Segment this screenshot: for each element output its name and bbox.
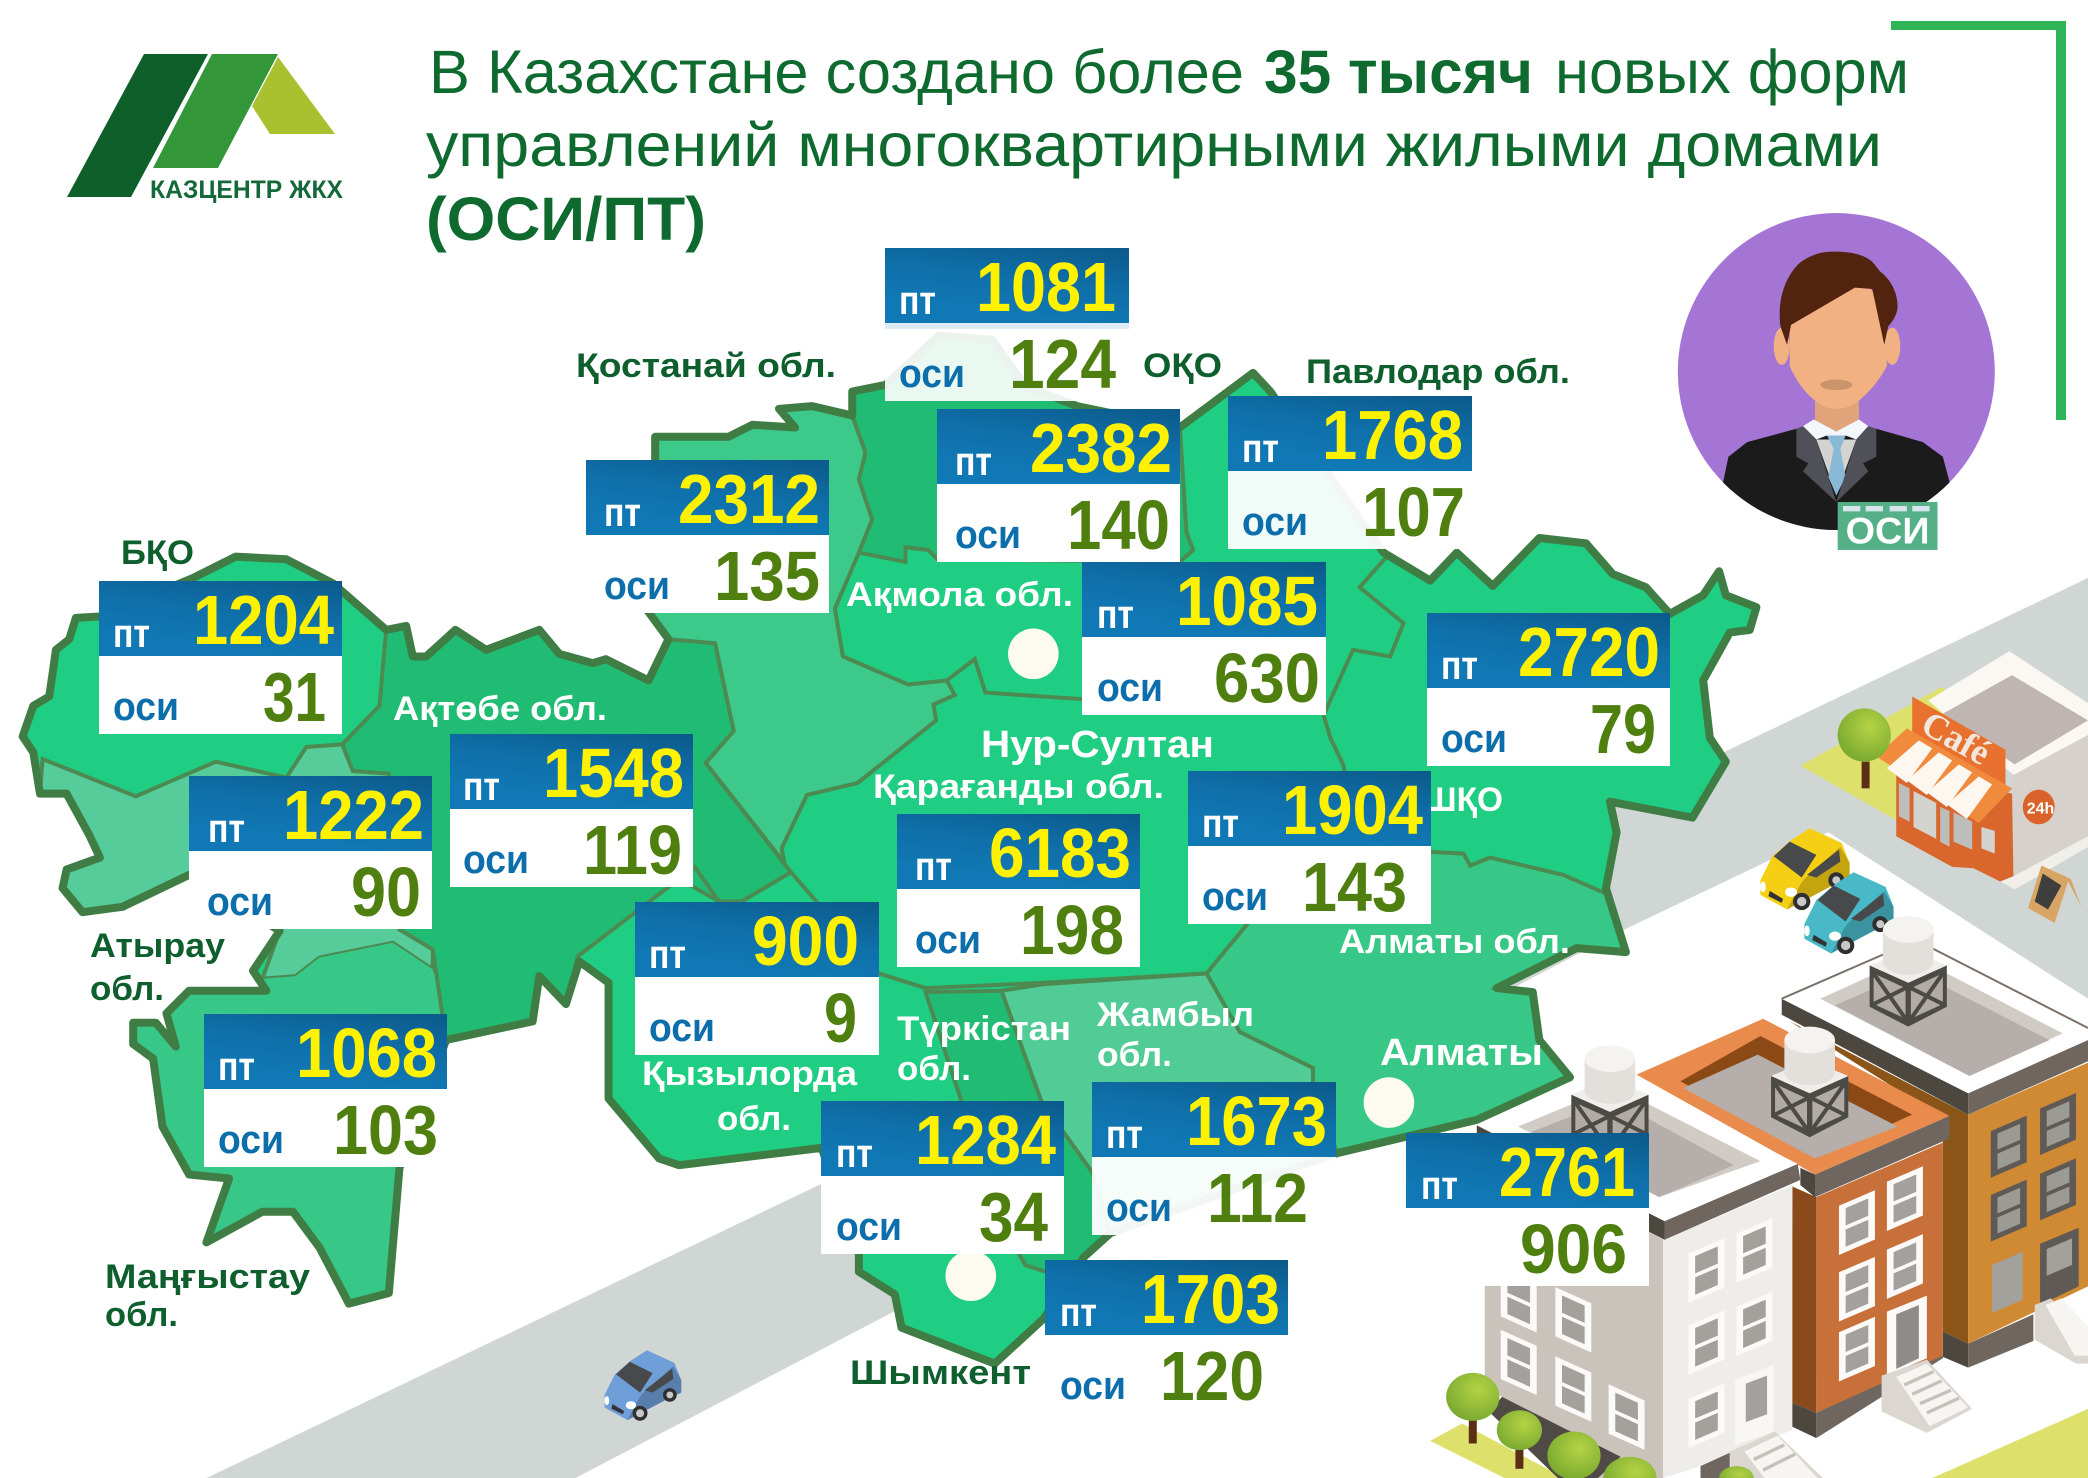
panel: ШҚО 1904 / 143: 143 xyxy=(1302,848,1407,926)
region: Kostanay xyxy=(639,406,955,863)
panel: Ақтөбе 1222 / 90: 90 xyxy=(351,853,421,931)
panel: Қызылорда 900 / 9: 900 xyxy=(752,902,859,980)
panel: Қостанай 2312 / 135: пт xyxy=(604,491,641,535)
cafe building: Café xyxy=(1915,703,1997,773)
illustration: person with OSI badge xyxy=(1678,213,1995,533)
water tanks xyxy=(1870,916,1947,1027)
city marker: Almaty xyxy=(1364,1077,1414,1128)
region labels: обл. xyxy=(105,1296,178,1334)
panel: Ақмола 1085 / 630: 630 xyxy=(1214,639,1320,717)
city marker: Shymkent xyxy=(945,1250,996,1301)
white building xyxy=(1485,1145,1663,1478)
title: В Казахстане создано более xyxy=(429,38,1244,106)
region: Almaty oblast xyxy=(1206,851,1626,1153)
map of Kazakhstan xyxy=(23,336,1756,1364)
title: управлений многоквартирными жилыми домами xyxy=(426,111,1882,179)
region labels: Маңғыстау xyxy=(105,1258,310,1296)
panel: Маңғыстау 1068 / 103: 103 xyxy=(333,1091,438,1169)
panel: ШҚО 1904 / 143: оси xyxy=(1202,875,1268,919)
panel: ОҚО 1081 / 124: оси xyxy=(899,352,965,396)
car: teal xyxy=(1804,872,1894,954)
title: 35 тысяч xyxy=(1264,38,1533,106)
region labels: Қызылорда xyxy=(642,1055,858,1093)
panel: Алматы 2761 / 906: 906 xyxy=(1520,1210,1627,1288)
panel: Павлодар 1768 / 107 xyxy=(1228,396,1472,551)
title xyxy=(426,38,1909,253)
region labels: ОҚО xyxy=(1143,347,1222,385)
panel: ШҚО 2720 / 79: оси xyxy=(1441,717,1507,761)
region labels: обл. xyxy=(1097,1036,1172,1074)
panel: Алматы 2761 / 906: пт xyxy=(1421,1164,1458,1208)
cafe building: 24h xyxy=(2027,801,2054,818)
panel: Ақтөбе 1222 / 90 xyxy=(189,776,432,931)
panel: Қарағанды 6183 / 198: 6183 xyxy=(989,814,1131,892)
panel: ОҚО 1081 / 124 xyxy=(885,248,1129,403)
panel: Павлодар 1768 / 107: 1768 xyxy=(1322,396,1463,474)
panel: Қарағанды 6183 / 198: 198 xyxy=(1020,891,1124,969)
region labels: Шымкент xyxy=(850,1354,1031,1392)
panel: Павлодар 1768 / 107: оси xyxy=(1242,500,1308,544)
panel: Жамбыл 1673 / 112: 112 xyxy=(1207,1159,1308,1237)
panel: Шымкент 1703 / 120 xyxy=(1045,1260,1288,1415)
panel: Ақтөбе 1222 / 90: 1222 xyxy=(283,776,424,854)
apartment buildings xyxy=(1430,916,2088,1478)
corner bracket xyxy=(1891,21,2066,420)
badge: OSI: ОСИ xyxy=(1846,509,1930,551)
panel: Маңғыстау 1068 / 103: 1068 xyxy=(296,1014,437,1092)
panel: ШҚО 1904 / 143 xyxy=(1188,771,1431,926)
region labels: Ақмола обл. xyxy=(846,576,1073,614)
panel: Қарағанды 6183 / 198 xyxy=(897,814,1140,969)
panel: Қызылорда 900 / 9: пт xyxy=(649,933,686,977)
region: Aktobe xyxy=(342,626,791,1040)
region labels: Жамбыл xyxy=(1096,996,1254,1034)
region: Zhambyl xyxy=(1001,973,1337,1233)
panel: Павлодар 1768 / 107: пт xyxy=(1242,427,1279,471)
region labels: обл. xyxy=(717,1100,791,1138)
region labels: ШҚО xyxy=(1423,781,1503,819)
right building xyxy=(1790,1021,1968,1344)
sandwich board xyxy=(2028,866,2081,923)
panel: ОҚО 1081 / 124: 124 xyxy=(1009,325,1116,403)
panel: ШҚО 2720 / 79 xyxy=(1427,613,1670,768)
region labels: Алматы xyxy=(1380,1032,1543,1074)
panel: Түркістан 1284 / 34: 1284 xyxy=(915,1101,1056,1179)
panel: Қостанай 2312 / 135 xyxy=(586,460,829,615)
region labels: Павлодар обл. xyxy=(1306,353,1570,391)
trees xyxy=(1469,1417,1477,1443)
panel: СҚО 2382 / 140 xyxy=(937,409,1180,564)
logo: Kazcenter ZhKH xyxy=(67,54,343,204)
panel: ШҚО 1904 / 143: 1904 xyxy=(1282,771,1423,849)
panel: Қарағанды 6183 / 198: оси xyxy=(915,918,981,962)
panel: СҚО 2382 / 140: 2382 xyxy=(1030,409,1172,487)
panel: Қостанай 2312 / 135: 135 xyxy=(714,537,820,615)
car: blue xyxy=(605,1350,681,1421)
region labels: Нур-Султан xyxy=(981,724,1214,766)
panel: Ақтөбе 1548 / 119: 119 xyxy=(583,811,682,889)
panel: Түркістан 1284 / 34: оси xyxy=(836,1205,902,1249)
panel: БҚО 1204 / 31: 1204 xyxy=(193,581,334,659)
panel: ШҚО 1904 / 143: пт xyxy=(1202,802,1239,846)
panel: Ақтөбе 1548 / 119: 1548 xyxy=(543,734,684,812)
panel: Маңғыстау 1068 / 103 xyxy=(204,1014,447,1169)
region labels: Қостанай обл. xyxy=(576,347,836,385)
panel: Ақтөбе 1548 / 119: пт xyxy=(463,765,500,809)
panel: Түркістан 1284 / 34: 34 xyxy=(979,1178,1048,1256)
panel: Ақтөбе 1222 / 90: оси xyxy=(207,880,273,924)
panel: Жамбыл 1673 / 112: оси xyxy=(1106,1186,1172,1230)
panel: Ақтөбе 1548 / 119: оси xyxy=(463,838,529,882)
panel: ШҚО 2720 / 79: 2720 xyxy=(1518,613,1660,691)
sign: 24h xyxy=(2023,790,2055,824)
panel: Ақтөбе 1548 / 119 xyxy=(450,734,693,889)
panel: БҚО 1204 / 31: пт xyxy=(113,612,150,656)
panel: Шымкент 1703 / 120: 1703 xyxy=(1141,1260,1280,1338)
region: Mangystau xyxy=(133,943,446,1304)
panel: БҚО 1204 / 31: 31 xyxy=(263,658,326,736)
panel: БҚО 1204 / 31: оси xyxy=(113,685,179,729)
panel: Ақмола 1085 / 630: 1085 xyxy=(1176,562,1318,640)
panel: Қызылорда 900 / 9: 9 xyxy=(824,979,857,1057)
region: Turkistan xyxy=(925,991,1111,1278)
logo: Kazcenter ZhKH: КАЗЦЕНТР ЖКХ xyxy=(150,176,343,204)
region: North Kazakhstan xyxy=(852,336,1193,562)
panel: ОҚО 1081 / 124: 1081 xyxy=(976,248,1116,326)
panel: ШҚО 2720 / 79: 79 xyxy=(1590,690,1656,768)
panel: Маңғыстау 1068 / 103: пт xyxy=(218,1045,255,1089)
car: yellow xyxy=(1760,828,1850,910)
panel: Ақмола 1085 / 630: оси xyxy=(1097,666,1163,710)
region labels: Ақтөбе обл. xyxy=(393,690,607,728)
panel: БҚО 1204 / 31 xyxy=(99,581,342,736)
panel: Қостанай 2312 / 135: оси xyxy=(604,564,670,608)
stairs xyxy=(1882,1360,1972,1433)
region: Atyrau xyxy=(40,744,433,979)
region labels xyxy=(90,347,1570,1392)
cafe building xyxy=(1800,651,2088,923)
region labels: Түркістан xyxy=(897,1010,1071,1048)
region labels: обл. xyxy=(897,1050,971,1088)
region labels: БҚО xyxy=(121,534,194,572)
panel: Түркістан 1284 / 34: пт xyxy=(836,1132,873,1176)
panel: Жамбыл 1673 / 112: 1673 xyxy=(1186,1082,1327,1160)
road xyxy=(206,578,2088,1478)
center building xyxy=(1791,1186,1816,1413)
panel: Ақмола 1085 / 630: пт xyxy=(1097,593,1134,637)
plots xyxy=(1430,1424,1565,1478)
panel: ОҚО 1081 / 124: пт xyxy=(899,279,936,323)
panel: СҚО 2382 / 140: оси xyxy=(955,513,1021,557)
panel: Шымкент 1703 / 120: оси xyxy=(1060,1364,1126,1408)
panel: ШҚО 2720 / 79: пт xyxy=(1441,644,1478,688)
panel: Шымкент 1703 / 120: пт xyxy=(1060,1291,1097,1335)
panel: Шымкент 1703 / 120: 120 xyxy=(1160,1337,1264,1415)
tree xyxy=(1838,708,1891,788)
region labels: обл. xyxy=(90,970,164,1008)
panel: Алматы 2761 / 906 xyxy=(1406,1133,1649,1288)
title: (ОСИ/ПТ) xyxy=(426,185,706,253)
panel: СҚО 2382 / 140: пт xyxy=(955,440,992,484)
panel: Қызылорда 900 / 9 xyxy=(635,902,879,1057)
panel: Жамбыл 1673 / 112: пт xyxy=(1106,1113,1143,1157)
panel: Түркістан 1284 / 34 xyxy=(821,1101,1064,1256)
panel: Маңғыстау 1068 / 103: оси xyxy=(218,1118,284,1162)
panel: СҚО 2382 / 140: 140 xyxy=(1067,486,1170,564)
panel: Жамбыл 1673 / 112 xyxy=(1092,1082,1336,1237)
region labels: Қарағанды обл. xyxy=(873,768,1164,806)
panel: Ақтөбе 1222 / 90: пт xyxy=(208,807,245,851)
city marker: Nur-Sultan xyxy=(1008,629,1059,679)
panel: Павлодар 1768 / 107: 107 xyxy=(1362,473,1465,551)
region labels: Алматы обл. xyxy=(1339,923,1570,961)
region labels: Атырау xyxy=(90,927,225,965)
panel: Ақмола 1085 / 630 xyxy=(1082,562,1326,717)
panel: Қызылорда 900 / 9: оси xyxy=(649,1006,715,1050)
panel: Қарағанды 6183 / 198: пт xyxy=(915,845,952,889)
title: новых форм xyxy=(1555,38,1909,106)
panel: Қостанай 2312 / 135: 2312 xyxy=(678,460,820,538)
panel: Алматы 2761 / 906: 2761 xyxy=(1499,1133,1635,1211)
